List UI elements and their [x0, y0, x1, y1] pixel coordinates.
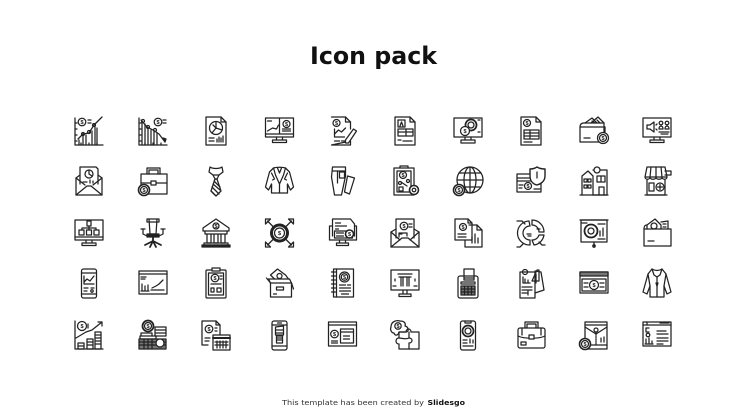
- icon: browser window with charts: [139, 271, 167, 294]
- icon: falling bar chart with coin: $: [156, 120, 160, 126]
- icon: monitor with gear and coin: $: [463, 129, 467, 135]
- icon: smartphone with card reader: [272, 321, 287, 350]
- icon: monitor with bank columns: [391, 270, 419, 296]
- icon: report with tags: [520, 270, 544, 298]
- icon: monitor with gear and coin: [454, 118, 482, 143]
- icon: coin with radiating arrows: [266, 219, 294, 247]
- icon: monitor with newspaper and coin: [330, 219, 356, 246]
- icon: briefcase with coin: [138, 168, 167, 196]
- icon: trousers: [332, 167, 354, 195]
- icon: invoice document with table: $: [525, 121, 529, 127]
- icon: globe with coin: $: [457, 188, 461, 194]
- icon: envelope with letter and chart: [76, 167, 102, 195]
- icon: bank building: $: [214, 224, 218, 230]
- icon: document with pencil: $: [335, 121, 338, 127]
- icon: printing calculator: [458, 269, 478, 298]
- icon: resume document: [395, 117, 415, 145]
- icon: browser window with report: [643, 322, 671, 346]
- icon: puzzle with coin: [391, 321, 419, 349]
- footer credit: Slidesgo: [428, 398, 465, 407]
- icon: wallet with banknotes and coin: $: [601, 136, 605, 142]
- icon: sealed envelope with coin: [580, 322, 607, 350]
- icon: globe with coin: [454, 167, 483, 196]
- icon: banknote in window: $: [592, 283, 596, 289]
- footer credit: This template has been created by: [281, 398, 425, 407]
- icon: falling bar chart with coin: [139, 118, 167, 145]
- icon: envelope with invoice: [391, 219, 419, 247]
- icon: buildings with coin: [580, 167, 608, 195]
- icon: briefcase with coin: $: [142, 188, 146, 194]
- icon: overlapping documents: [455, 219, 482, 247]
- icon: monitor with newspaper and coin: $: [348, 232, 351, 238]
- icon grid: [75, 117, 671, 350]
- icon: document and calendar: [202, 321, 230, 350]
- icon: document and calendar: $: [207, 327, 211, 333]
- icon: clipboard with coin: [206, 268, 226, 298]
- icon: banknote in window: [580, 272, 608, 293]
- icon: briefcase: [518, 322, 545, 348]
- icon: monitor with chart and coin: [266, 118, 294, 142]
- icon: document with pie chart: [206, 117, 226, 145]
- icon: clipboard with coin and badge: $: [401, 173, 405, 179]
- icon: overlapping documents: $: [461, 225, 465, 231]
- icon: circular pie diagram: [517, 220, 545, 247]
- icon: monitor with megaphone and people: [643, 118, 671, 142]
- icon: presentation board: [580, 220, 608, 247]
- icon: credit card with shield: [517, 167, 545, 192]
- icon: puzzle with coin: $: [396, 324, 400, 330]
- icon: bank building: [202, 219, 230, 247]
- icon: suit jacket: [266, 167, 294, 193]
- icon: smartphone with coin: [460, 321, 476, 350]
- icon: shirt jacket: [643, 269, 671, 297]
- icon: browser window with coin: [328, 322, 356, 346]
- icon: folder with coin and money: [644, 219, 671, 246]
- icon: monitor with chart and coin: $: [285, 122, 288, 128]
- icon: browser window with coin: $: [333, 332, 336, 338]
- icon: monitor with org chart: [75, 220, 103, 246]
- icon: smartphone with chart: [82, 269, 96, 298]
- icon: office chair: [141, 219, 165, 247]
- icon: rising bar chart with coin: [75, 117, 103, 145]
- icon: spiral notebook: [332, 269, 354, 297]
- icon: clipboard with coin: $: [213, 276, 217, 282]
- icon: rising bar chart with coin: $: [80, 120, 84, 126]
- icon: coin stacks and growth arrow: [75, 321, 103, 349]
- icon: shop with medical cross: [645, 167, 671, 195]
- icon: box with banknotes: [266, 269, 294, 297]
- icon: invoice document with table: [521, 117, 541, 145]
- icon: coin stacks and growth arrow: $: [80, 324, 84, 330]
- icon: pile of coins: [139, 320, 166, 349]
- icon: clipboard with coin and badge: [394, 166, 418, 195]
- icon: wallet with banknotes and coin: [580, 117, 608, 144]
- icon: pile of coins: $: [146, 324, 150, 330]
- icon: spiral notebook: $: [343, 275, 346, 281]
- icon: credit card with shield: $: [526, 184, 530, 190]
- icon: coin with radiating arrows: $: [278, 231, 281, 237]
- title: Icon pack: [310, 42, 438, 70]
- icon: sealed envelope with coin: $: [583, 342, 587, 348]
- icon: document with pencil: [332, 117, 356, 145]
- icon: envelope with invoice: $: [402, 224, 406, 230]
- icon: necktie: [209, 167, 223, 196]
